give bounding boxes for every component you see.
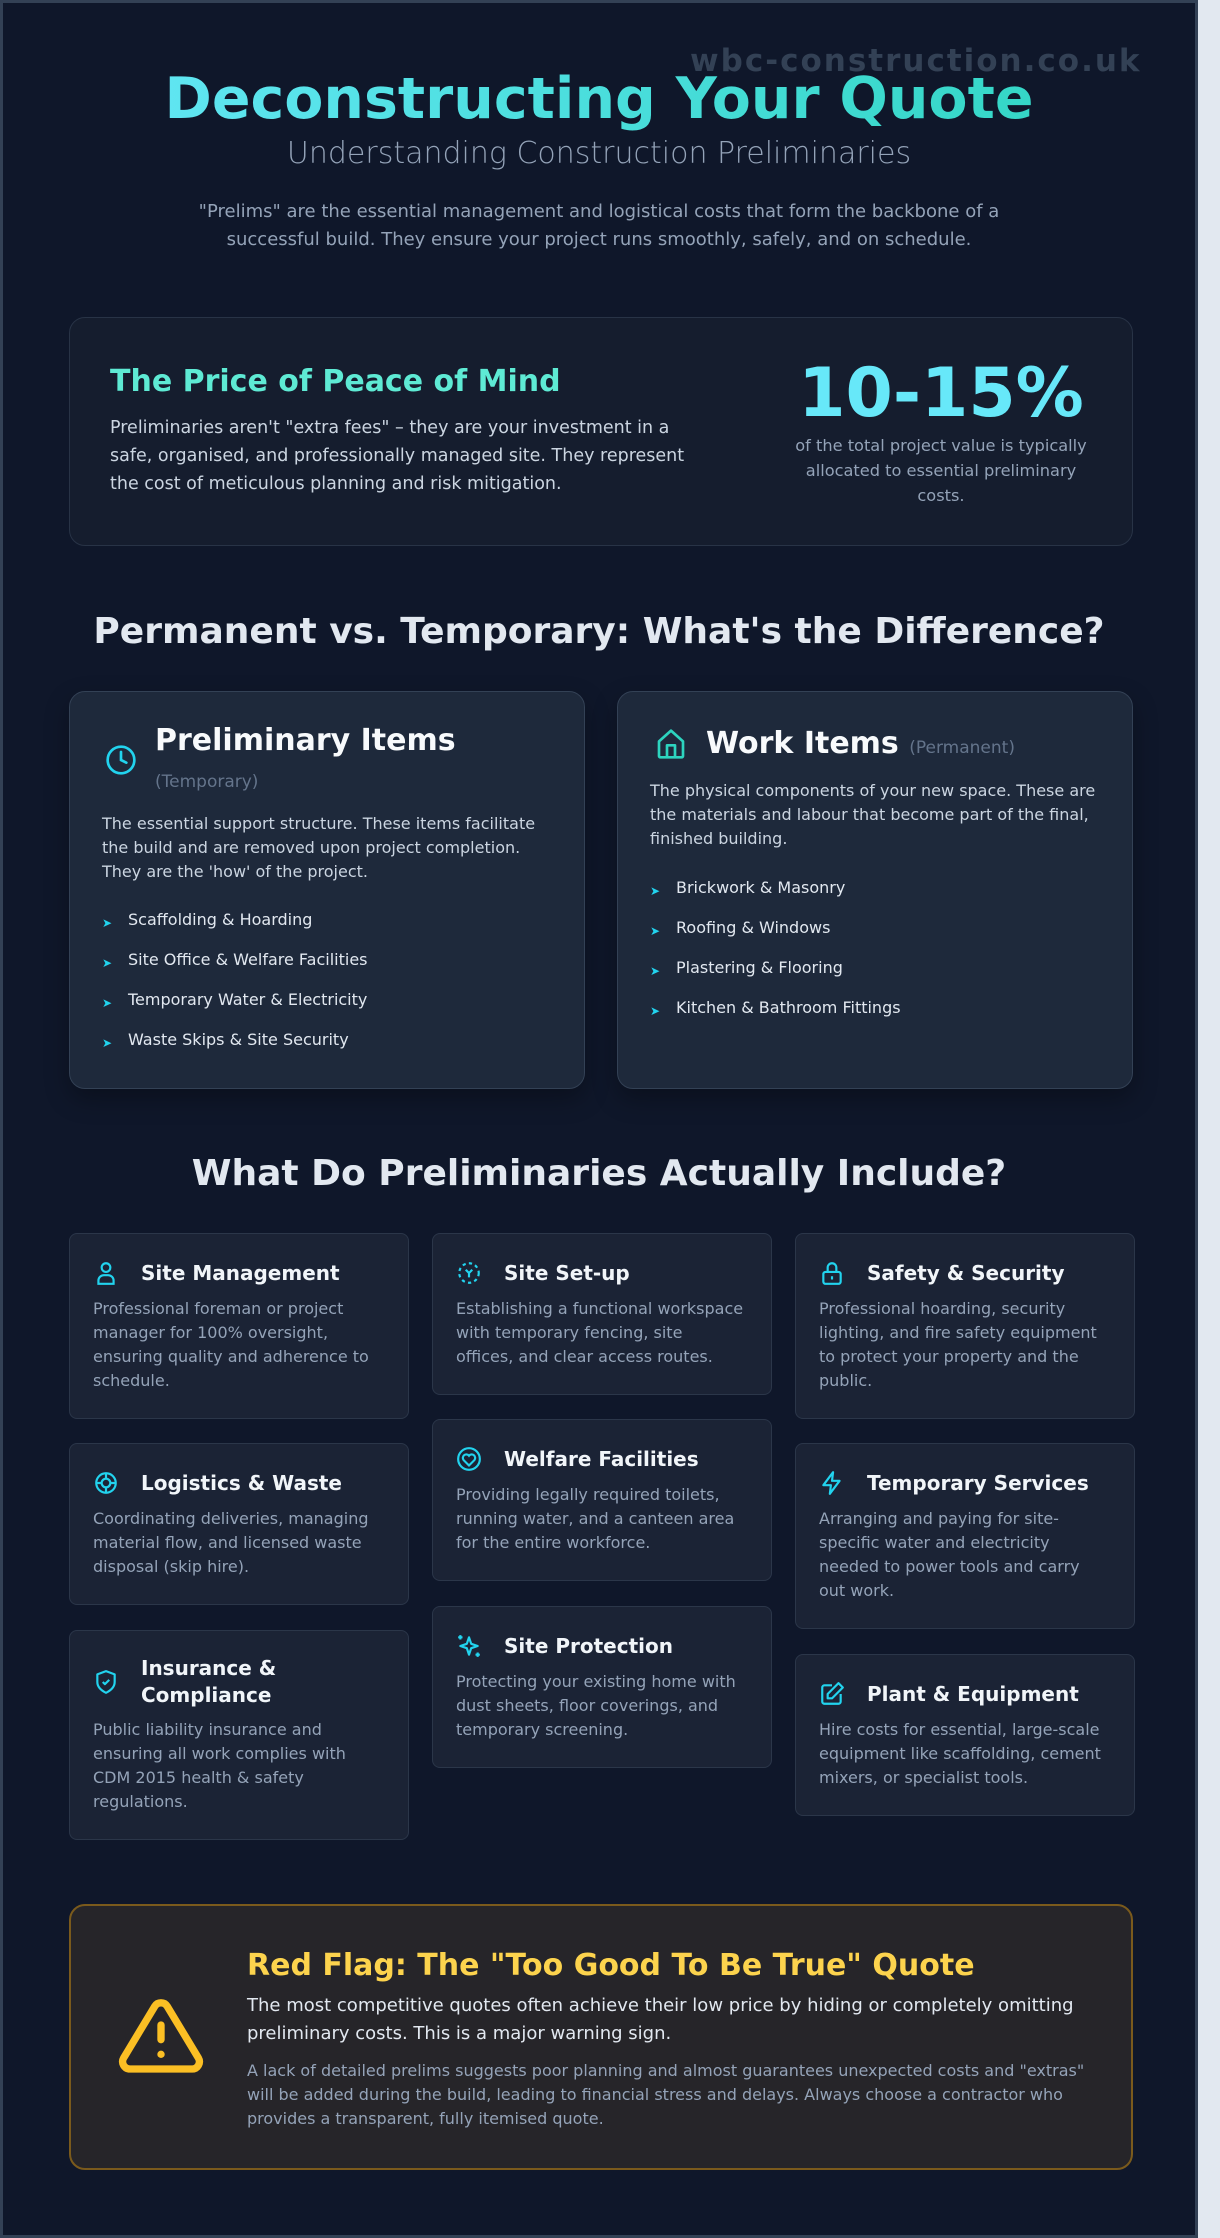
icon: warning triangle (118, 1999, 204, 2073)
card: logistics & waste (69, 1443, 409, 1605)
card: welfare facilities (432, 1419, 772, 1581)
heading: Red Flag: The "Too Good To Be True" Quote (247, 1948, 975, 1983)
card: site management (69, 1233, 409, 1419)
label: temporary: (Temporary) (155, 772, 258, 792)
heading: The Price of Peace of Mind (110, 364, 561, 399)
list: Scaffolding & Hoarding (128, 910, 312, 929)
heading: permanent vs temporary: Permanent vs. Temporary: What's the Difference? (93, 611, 1105, 652)
list: Site Office & Welfare Facilities (128, 950, 368, 969)
card: insurance & compliance (69, 1630, 409, 1840)
card: safety & security: Professional hoarding, security lighting, and fire safety equipment to protect your property and the public. (819, 1299, 1097, 1390)
card: logistics & waste: Logistics & Waste (141, 1470, 342, 1494)
list: Waste Skips & Site Security (128, 1030, 349, 1049)
card: safety & security: Safety & Security (867, 1260, 1065, 1284)
watermark: wbc-construction.co.uk (690, 43, 1142, 79)
card: site management: Site Management (141, 1260, 340, 1284)
card: welfare facilities: Welfare Facilities (504, 1446, 699, 1470)
list: Roofing & Windows (676, 918, 830, 937)
title: Deconstructing Your Quote (164, 66, 1034, 132)
description: The physical components of your new space. These are the materials and labour that become part of the final, finished building. (650, 781, 1095, 848)
card: site protection (432, 1606, 772, 1768)
card: site management: Professional foreman or project manager for 100% oversight, ensuring quality and adherence to schedule. (93, 1299, 369, 1390)
card: site set-up: Establishing a functional workspace with temporary fencing, site (456, 1299, 743, 1342)
list: Kitchen & Bathroom Fittings (676, 998, 901, 1017)
card: site set-up: Site Set-up (504, 1260, 630, 1284)
card: plant & equipment: Plant & Equipment (867, 1682, 1079, 1706)
text block: The most competitive quotes often achieve their low price by hiding or completely omitting preliminary costs. This is a major warning sign. (247, 1995, 1074, 2044)
icon: house (658, 729, 684, 759)
description: The essential support structure. These items facilitate the build and are removed upon project completion. They are the 'how' of the project. (102, 814, 535, 881)
panel: work items (617, 691, 1133, 1089)
card: safety & security (795, 1233, 1135, 1419)
panel: red flag warning (69, 1904, 1133, 2170)
card: insurance & compliance: Compliance (141, 1683, 271, 1707)
card: insurance & compliance: Public liability insurance and ensuring all work complies with CDM 2015 health & safety regulations. (93, 1720, 346, 1811)
card: plant & equipment (795, 1654, 1135, 1816)
card: site protection: Protecting your existing home with dust sheets, floor coverings, and temporary screening. (456, 1672, 736, 1739)
text block: advice: A lack of detailed prelims suggests poor planning and almost guarantees unexpected costs and "extras" will be added during the build, leading to financial stress and delays. Always choose a contractor who provides a transparent, fully itemised quote. (247, 2061, 1084, 2128)
card: temporary services (795, 1443, 1135, 1629)
list (651, 878, 901, 1017)
card: insurance & compliance: Insurance & (141, 1656, 276, 1680)
subtitle: Understanding Construction Preliminaries (287, 136, 911, 171)
title (3, 63, 1195, 135)
card: plant & equipment: Hire costs for essential, large-scale equipment like scaffolding, cement mixers, or specialist tools. (819, 1720, 1101, 1787)
panel: preliminary items (69, 691, 585, 1089)
card: welfare facilities: Providing legally required toilets, running water, and a canteen area for the entire workforce. (456, 1485, 734, 1552)
heading: what do preliminaries include: What Do Preliminaries Actually Include? (192, 1153, 1006, 1194)
card: site set-up (432, 1233, 772, 1395)
intro text: "Prelims" are the essential management and logistical costs that form the backbone of a successful build. They ensure your project runs smoothly, safely, and on schedule. (199, 201, 999, 250)
list: Temporary Water & Electricity (128, 990, 367, 1009)
list: Plastering & Flooring (676, 958, 843, 977)
panel: price of peace of mind (69, 317, 1133, 546)
icon: clock (106, 745, 136, 775)
text block: Preliminaries aren't "extra fees" – they are your investment in a safe, organised, and professionally managed site. They represent the cost of meticulous planning and risk mitigation. (110, 418, 684, 494)
heading: Preliminary Items (155, 723, 456, 758)
card: site set-up: offices, and clear access routes. (456, 1347, 713, 1366)
list: Brickwork & Masonry (676, 878, 845, 897)
card: temporary services: Temporary Services (867, 1470, 1089, 1494)
card: temporary services: Arranging and paying for site-specific water and electricity needed to power tools and carry out work. (819, 1509, 1080, 1600)
heading: Work Items (Permanent) (706, 726, 1015, 761)
card: logistics & waste: Coordinating deliveries, managing material flow, and licensed waste disposal (skip hire). (93, 1509, 369, 1576)
list (103, 910, 368, 1049)
stat caption: of the total project value is typically allocated to essential preliminary costs. (795, 436, 1087, 505)
card: site protection: Site Protection (504, 1634, 673, 1658)
stat: 10-15%: 10-15% (798, 354, 1084, 433)
